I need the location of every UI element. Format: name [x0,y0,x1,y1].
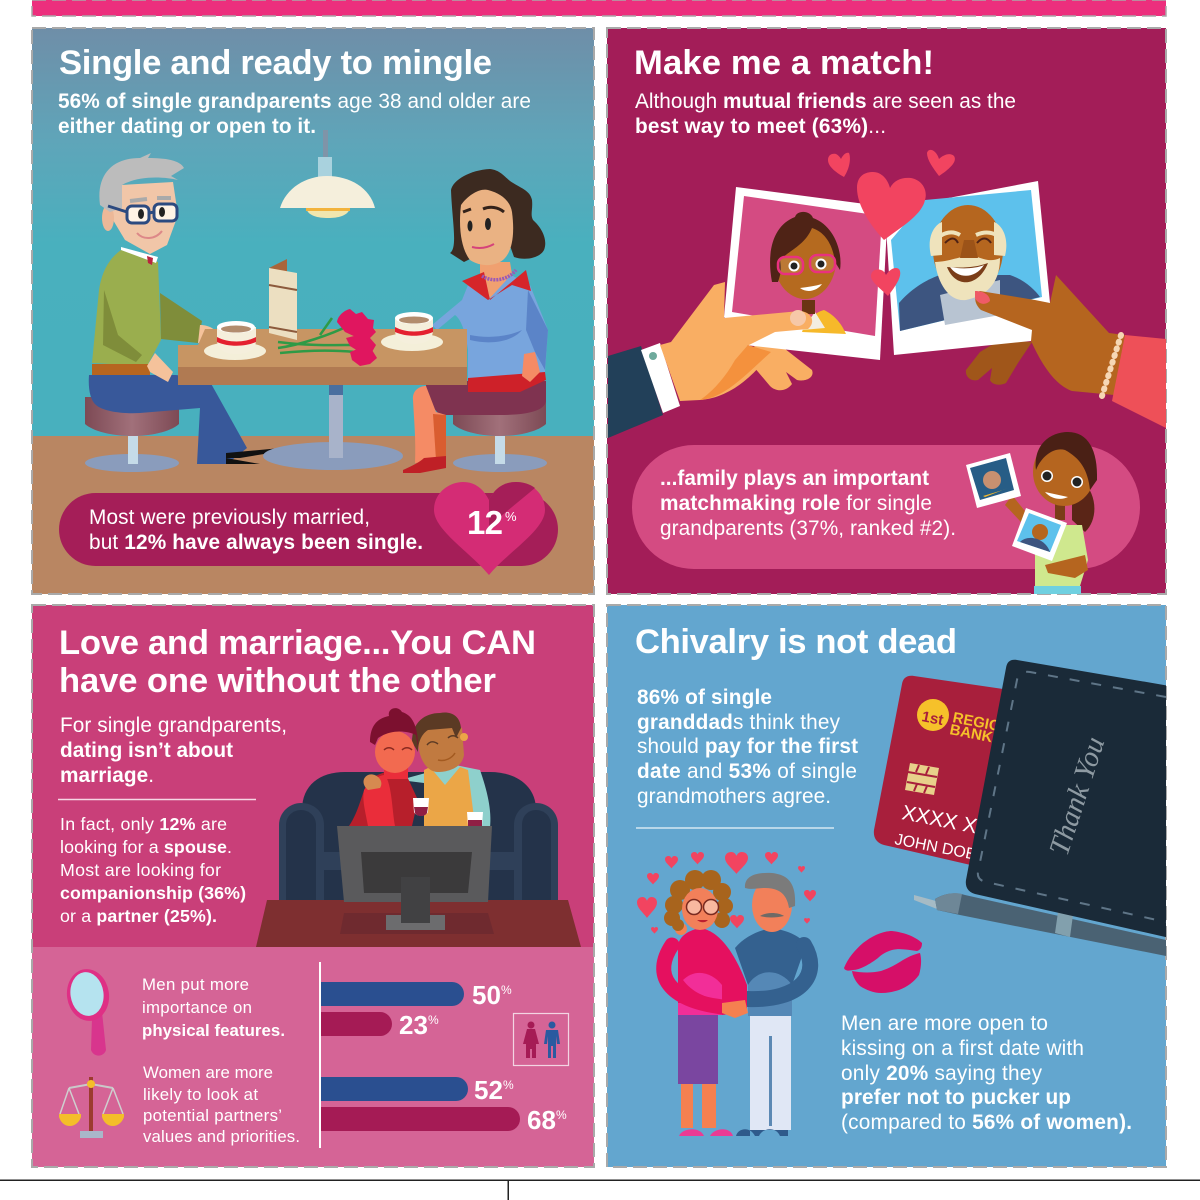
text: previously married [89,506,423,554]
bar: men physical 50% [321,980,512,1010]
bar: women values 68%: % [556,1108,567,1122]
top banner bar [32,0,1166,16]
panel: chivalry is not dead [607,605,1170,1167]
figure: woman [403,169,548,473]
text: women values [143,1063,300,1146]
icon: credit card: REGIO [951,709,1002,735]
text: men physical features: Men put more [142,975,249,994]
text: what they are looking for: or a partner (25%). [60,906,217,926]
icon: heart 12%: % [505,509,517,524]
panel: love and marriage [32,605,594,1167]
text: thank you: Thank You [1043,733,1111,859]
text: previously married: but 12% have always been single. [89,531,423,554]
icon: heart 12% [434,482,545,575]
footer rule [0,1180,1200,1200]
icon: heart 12%: 12 [467,504,503,541]
bar: men values 52%: % [503,1078,514,1092]
text: pay for the first date [637,686,858,808]
figure: woman on sofa [349,708,418,826]
text: what they are looking for: In fact, only 12% are [60,814,227,834]
fingers: right hand behind photo [966,340,1032,385]
text: what they are looking for: companionship (36%) [60,883,246,903]
illustration: two hands holding photos [608,150,1166,438]
text: 56% of single grandparents: 56% of single grandparents age 38 and older are [58,90,531,113]
bar: women values 68% [321,1105,567,1135]
bar: men physical 50%: % [501,983,512,997]
table [178,329,467,470]
photo: man [885,181,1050,355]
text: pay for the first date: should pay for the first [637,735,858,758]
text: men physical features: importance on [142,998,252,1017]
menu [269,259,297,340]
fingers: left hand behind photo [754,346,812,390]
illustration: couple watching tv [256,708,581,947]
text: mutual friends: Although mutual friends are seen as the [635,90,1016,113]
bar: men physical 50%: 50 [472,980,501,1010]
bar: women values 68%: 68 [527,1105,556,1135]
figure: embracing couple [637,852,816,1136]
illustration: dining couple [85,130,548,473]
legend: women and men [514,1014,568,1066]
text: kissing on a first date [841,1012,1132,1134]
text: 56% of single grandparents: either dating or open to it. [58,115,316,138]
icon: credit card: 1st [920,708,945,729]
text: dating isn't about marriage: dating isn’t about [60,739,233,762]
heading: make me a match: Make me a match! [634,44,934,82]
icon: hand mirror [64,966,112,1056]
text: what they are looking for: Most are looking for [60,860,221,880]
text: women values: potential partners’ [143,1106,282,1125]
text: 56% of single grandparents [58,90,531,138]
sleeve: left hand [608,343,680,438]
icon: hearts [637,852,816,934]
text: dating isn't about marriage: For single grandparents, [60,714,287,737]
text: family matchmaking: ...family plays an important [660,467,929,490]
icon: pendant lamp [280,130,375,218]
text: pay for the first date: date and 53% of single [637,760,857,783]
icon: hearts [828,150,955,296]
text: pay for the first date: grandmothers agree. [637,785,831,808]
text: family matchmaking: grandparents (37%, ranked #2). [660,517,956,540]
icon: credit card: BANK [948,721,994,746]
icon: credit card: XXXX XX [900,801,993,841]
panel: make me a match [607,28,1166,596]
figure: man on sofa [400,713,490,828]
text: family matchmaking: matchmaking role for single [660,492,932,515]
heading: love and marriage: have one without the other [59,662,496,700]
woman [664,870,747,1136]
man [735,873,810,1136]
cup left [204,321,266,360]
panel: single and ready to mingle [32,28,594,594]
bar: men values 52% [321,1075,514,1105]
text: women values: Women are more [143,1063,273,1082]
right hand [975,275,1166,428]
icon: credit card [874,676,1010,866]
text: previously married: Most were previously married, [89,506,370,529]
text: kissing on a first date: prefer not to pucker up [841,1086,1071,1109]
icon: wine glasses [413,798,483,826]
text: dating isn't about marriage [60,714,287,787]
photo: woman [724,187,888,360]
icon: stool right [453,400,547,472]
icon: pen [914,893,1166,956]
hands [722,1000,748,1018]
heading: chivalry: Chivalry is not dead [635,623,957,661]
sofa [279,772,558,900]
callout: family plays a role [632,432,1140,596]
icon: tv [337,826,492,930]
text: mutual friends: best way to meet (63%)... [635,115,886,138]
figure: girl with photos [966,432,1097,596]
heading: love and marriage: Love and marriage...You CAN [59,624,536,662]
bar: women physical 23%: % [428,1013,439,1027]
icon: scales [59,1077,124,1138]
icon: credit card: JOHN DOE [893,831,978,864]
text: men physical features [142,975,285,1040]
icon: stool left [85,397,179,472]
bar: women physical 23%: 23 [399,1010,428,1040]
text: kissing on a first date: Men are more open to [841,1012,1048,1035]
table [256,900,581,947]
text: mutual friends [635,90,1016,138]
text: kissing on a first date: (compared to 56% of women). [841,1111,1132,1134]
text: what they are looking for: looking for a spouse. [60,837,232,857]
heading: love and marriage [59,624,536,700]
bar chart [321,980,567,1135]
callout: always been single [59,482,558,575]
icon: wallet [966,660,1170,938]
text: kissing on a first date: only 20% saying they [841,1062,1043,1085]
text: pay for the first date: 86% of single [637,686,772,709]
text: women values: likely to look at [143,1085,258,1104]
bar: men values 52%: 52 [474,1075,503,1105]
text: women values: values and priorities. [143,1127,300,1146]
left hand [660,282,812,401]
icon: flowers [278,309,377,366]
text: men physical features: physical features. [142,1021,285,1040]
text: family matchmaking [660,467,956,540]
text: what they are looking for [60,814,246,926]
heading: single and ready to mingle: Single and ready to mingle [59,44,492,82]
cup right [381,312,443,351]
icon: lips [844,931,922,993]
figure: man [89,153,281,464]
text: kissing on a first date: kissing on a first date with [841,1037,1084,1060]
text: dating isn't about marriage: marriage. [60,764,154,787]
text: pay for the first date: granddads think they [637,711,841,734]
bar: women physical 23% [321,1010,439,1040]
